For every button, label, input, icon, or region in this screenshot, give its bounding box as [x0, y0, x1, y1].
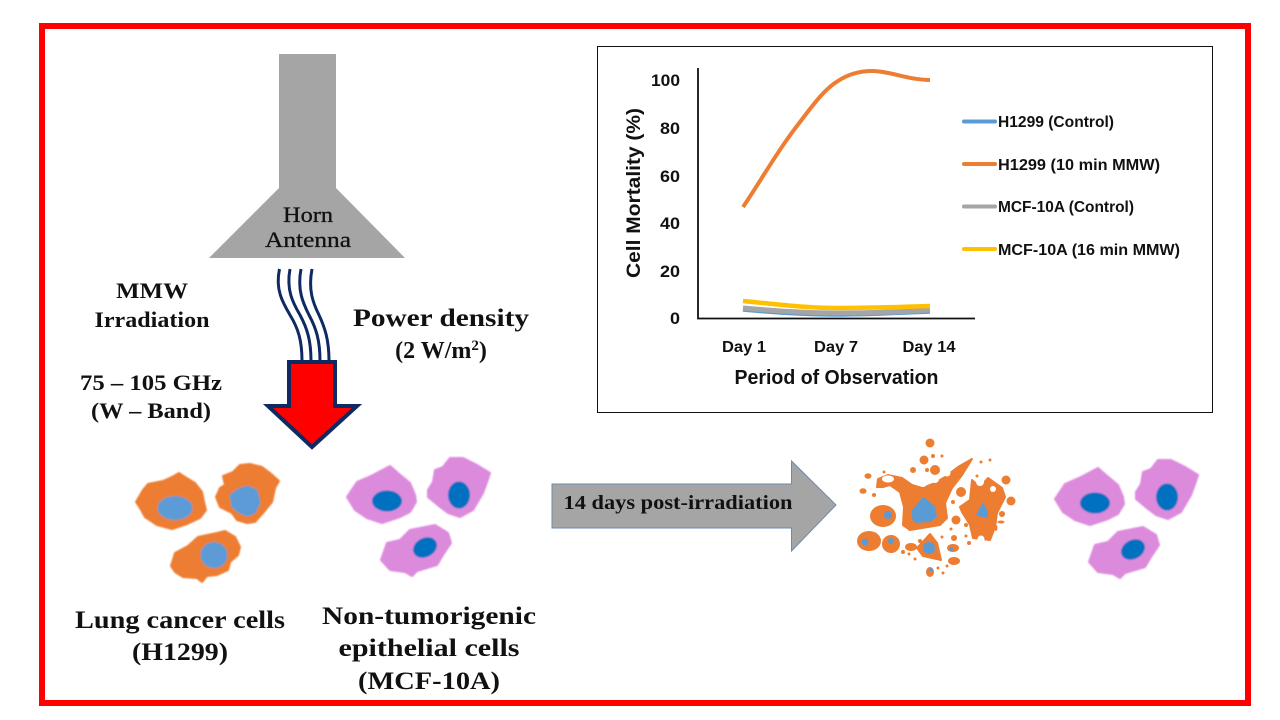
- x axis tick labels: [722, 339, 956, 356]
- y axis tick labels: 100: [651, 71, 680, 90]
- line: H1299 control: [743, 310, 930, 315]
- line: H1299 10 min: [743, 71, 930, 207]
- horn antenna label: [265, 202, 351, 252]
- label: non-tumorigenic epithelial cells: [322, 603, 536, 695]
- dead cancer cells fragmenting: [857, 438, 1016, 577]
- line: MCF-10A 16 min: [743, 301, 930, 308]
- legend: H1299 (Control): [998, 114, 1114, 131]
- label: frequency band: [80, 370, 222, 423]
- legend: MCF-10A (16 min MMW): [998, 242, 1180, 259]
- lung cancer cells group: [136, 464, 279, 582]
- red downward arrow: [268, 362, 357, 447]
- normal cell 3: [381, 525, 451, 576]
- legend: H1299 (10 min MMW): [998, 157, 1160, 174]
- label: non-tumorigenic epithelial cells: Non-tumorigenic: [322, 603, 536, 630]
- label: MMW irradiation: [94, 278, 210, 332]
- horn antenna label: Antenna: [265, 227, 351, 252]
- label: non-tumorigenic epithelial cells: epithelial cells: [338, 635, 520, 662]
- y axis tick labels: 0: [670, 309, 680, 328]
- chart axes: [698, 68, 975, 318]
- label: lung cancer cells: Lung cancer cells: [75, 607, 285, 634]
- grey arrow: 14 days post-irradiation: [552, 461, 836, 551]
- y axis tick labels: 20: [660, 262, 680, 281]
- x axis tick labels: Day 7: [814, 339, 858, 356]
- y axis tick labels: [651, 71, 680, 328]
- label: lung cancer cells: [75, 607, 285, 666]
- legend: MCF-10A (Control): [998, 199, 1134, 216]
- label: power density: Power density: [353, 305, 530, 332]
- panel: cell mortality line chart: [598, 46, 1212, 412]
- horn antenna: [209, 54, 405, 258]
- x axis tick labels: Day 1: [722, 339, 766, 356]
- label: power density: ): [479, 338, 487, 364]
- surviving non-tumorigenic cells: [1055, 460, 1198, 578]
- legend: [964, 114, 1180, 259]
- line: MCF-10A control: [743, 308, 930, 313]
- label: frequency band: 75 – 105 GHz: [80, 370, 222, 395]
- x axis title: Period of Observation: [734, 367, 938, 389]
- cancer cell 1: [136, 473, 206, 529]
- y axis title: Cell Mortality (%): [624, 108, 645, 278]
- label: frequency band: (W – Band): [91, 398, 211, 423]
- cancer cell 2: [216, 464, 279, 523]
- label: MMW irradiation: MMW: [116, 278, 188, 303]
- non-tumorigenic cells group: [347, 458, 490, 576]
- grey arrow: 14 days post-irradiation: 14 days post-irradiation: [564, 492, 792, 514]
- label: MMW irradiation: Irradiation: [94, 307, 210, 332]
- x axis tick labels: Day 14: [902, 339, 956, 356]
- MMW irradiation waves: [278, 269, 329, 361]
- cancer cell 3: [171, 531, 240, 582]
- label: lung cancer cells: (H1299): [132, 639, 228, 666]
- y axis tick labels: 40: [660, 214, 680, 233]
- normal cell 1: [347, 466, 416, 523]
- normal cell 2: [428, 458, 490, 517]
- horn antenna label: Horn: [283, 202, 333, 227]
- label: power density: 2: [471, 338, 479, 354]
- label: non-tumorigenic epithelial cells: (MCF-10A): [358, 668, 500, 695]
- y axis tick labels: 80: [660, 119, 680, 138]
- y axis tick labels: 60: [660, 167, 680, 186]
- label: power density: (2 W/m: [395, 338, 471, 364]
- label: power density: [353, 305, 530, 364]
